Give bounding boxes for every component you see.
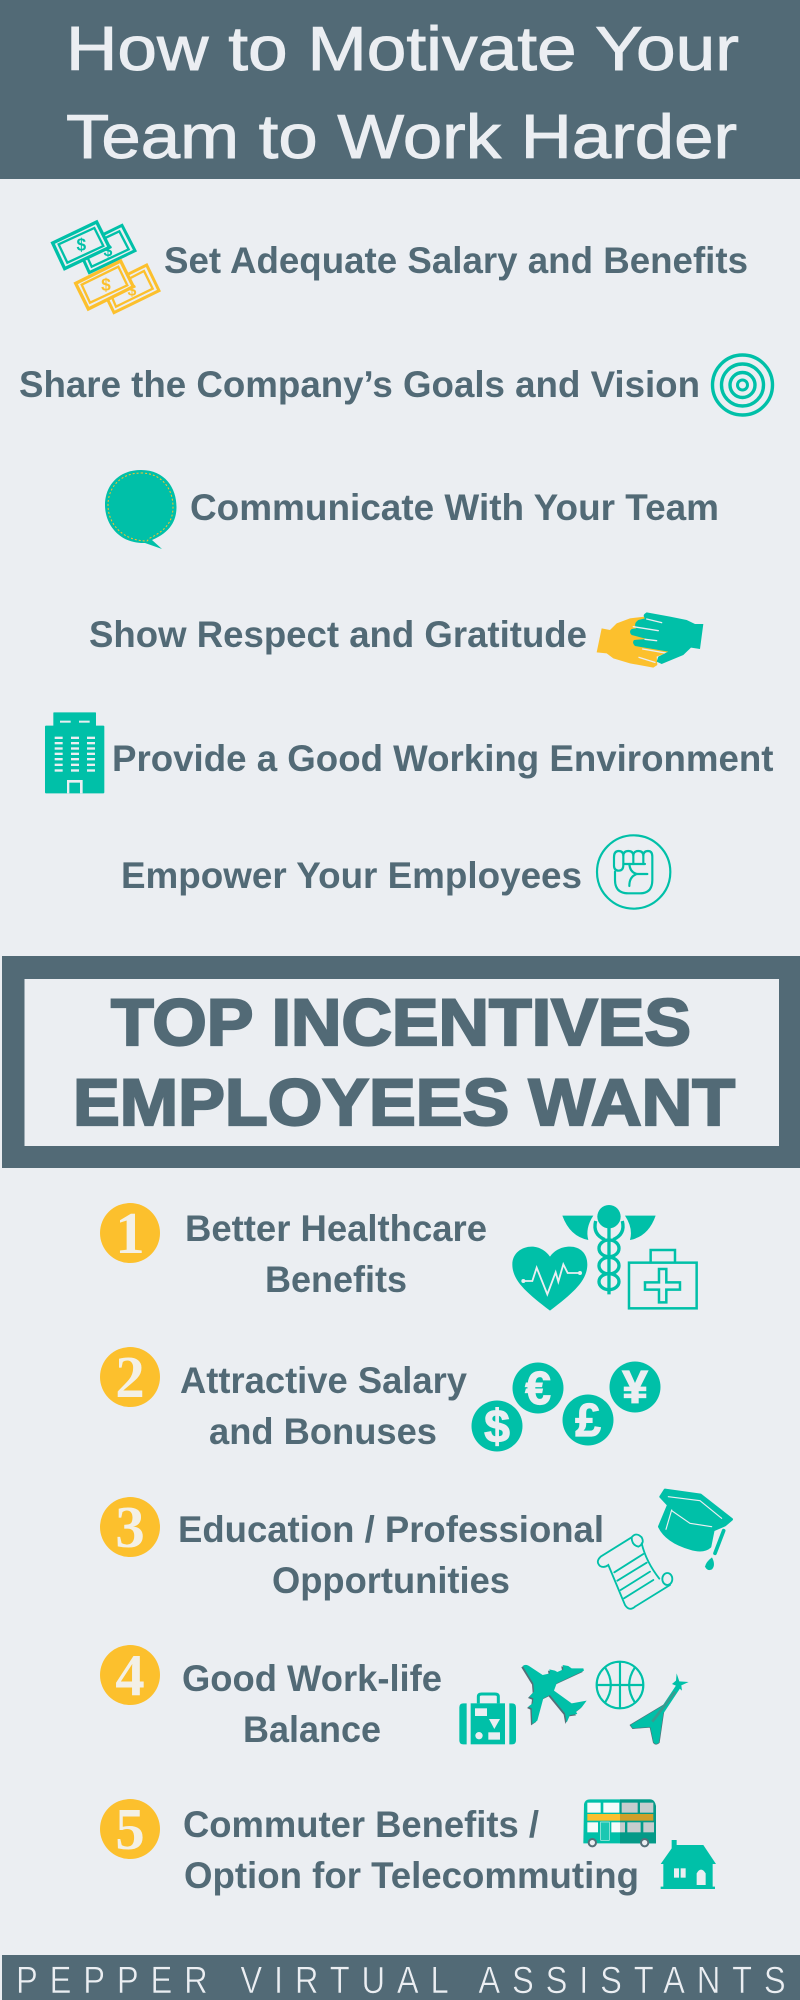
icon: leisure group [459, 1662, 689, 1744]
icon: money notes [53, 222, 159, 313]
icon: graduation cap and diploma [598, 1490, 732, 1609]
panel: motivation tips [19, 222, 774, 909]
text: commuter benefits: Commuter Benefits / [183, 1804, 539, 1845]
panel: top incentives banner [2, 956, 800, 1168]
text: communicate: Communicate With Your Team [190, 487, 719, 528]
icon: handshake [597, 612, 703, 668]
text: work-life balance [182, 1658, 442, 1750]
text: salary and benefits: Set Adequate Salary and Benefits [164, 240, 748, 281]
panel: incentive 2 salary [100, 1344, 660, 1452]
number badge 3 [100, 1494, 160, 1560]
number badge 5: 5 [115, 1796, 145, 1862]
panel: incentive 1 healthcare [100, 1200, 697, 1311]
text: working environment: Provide a Good Working Environment [112, 738, 774, 779]
text: healthcare [185, 1208, 487, 1300]
text: commuter benefits: Option for Telecommuting [184, 1855, 639, 1896]
text: respect and gratitude: Show Respect and Gratitude [89, 614, 587, 655]
icon: currency coins: € [525, 1362, 551, 1414]
icon: bus and house [583, 1799, 716, 1889]
number badge 5 [100, 1796, 160, 1862]
number badge 2 [100, 1344, 160, 1410]
panel: incentive 3 education [100, 1490, 732, 1609]
text: salary and bonuses: Attractive Salary [180, 1360, 467, 1401]
panel: footer [2, 1955, 800, 2000]
number badge 1: 1 [115, 1200, 145, 1266]
text: salary and bonuses: and Bonuses [209, 1411, 437, 1452]
text: work-life balance: Good Work-life [182, 1658, 442, 1699]
text: healthcare: Benefits [265, 1259, 407, 1300]
heading: top incentives [73, 985, 735, 1139]
icon: speech bubble [105, 470, 176, 549]
icon: office building [45, 712, 104, 793]
text: commuter benefits [183, 1804, 639, 1896]
title: Team to Work Harder [66, 103, 737, 172]
text: education: Education / Professional [178, 1509, 604, 1550]
number badge 1 [100, 1200, 160, 1266]
heading: top incentives: EMPLOYEES WANT [73, 1065, 735, 1139]
number badge 3: 3 [115, 1494, 145, 1560]
icon: money notes: $ [104, 243, 113, 260]
text: goals and vision: Share the Company’s Goals and Vision [19, 364, 700, 405]
number badge 4 [100, 1642, 160, 1708]
icon: currency coins: £ [575, 1394, 601, 1446]
title [66, 15, 739, 172]
number badge 2: 2 [115, 1344, 145, 1410]
panel: title header [0, 0, 800, 179]
panel: incentive 4 work-life balance [100, 1642, 689, 1750]
icon: target [712, 355, 772, 415]
text: empower employees: Empower Your Employees [121, 855, 582, 896]
icon: money notes: $ [128, 282, 137, 299]
text: healthcare: Better Healthcare [185, 1208, 487, 1249]
icon: money notes: $ [101, 275, 111, 295]
icon: raised fist [597, 835, 670, 909]
panel: incentive 5 commuter benefits [100, 1796, 716, 1896]
text: salary and bonuses [180, 1360, 467, 1452]
icon: currency coins: $ [484, 1400, 510, 1452]
number badge 4: 4 [115, 1642, 145, 1708]
heading: top incentives: TOP INCENTIVES [111, 985, 691, 1059]
icon: medical group [512, 1205, 697, 1311]
text: work-life balance: Balance [243, 1709, 381, 1750]
text: education: Opportunities [272, 1560, 510, 1601]
icon: currency coins [472, 1361, 660, 1452]
text: education [178, 1509, 604, 1601]
title: How to Motivate Your [66, 15, 739, 84]
icon: money notes: $ [77, 235, 87, 255]
icon: currency coins: ¥ [622, 1361, 648, 1413]
